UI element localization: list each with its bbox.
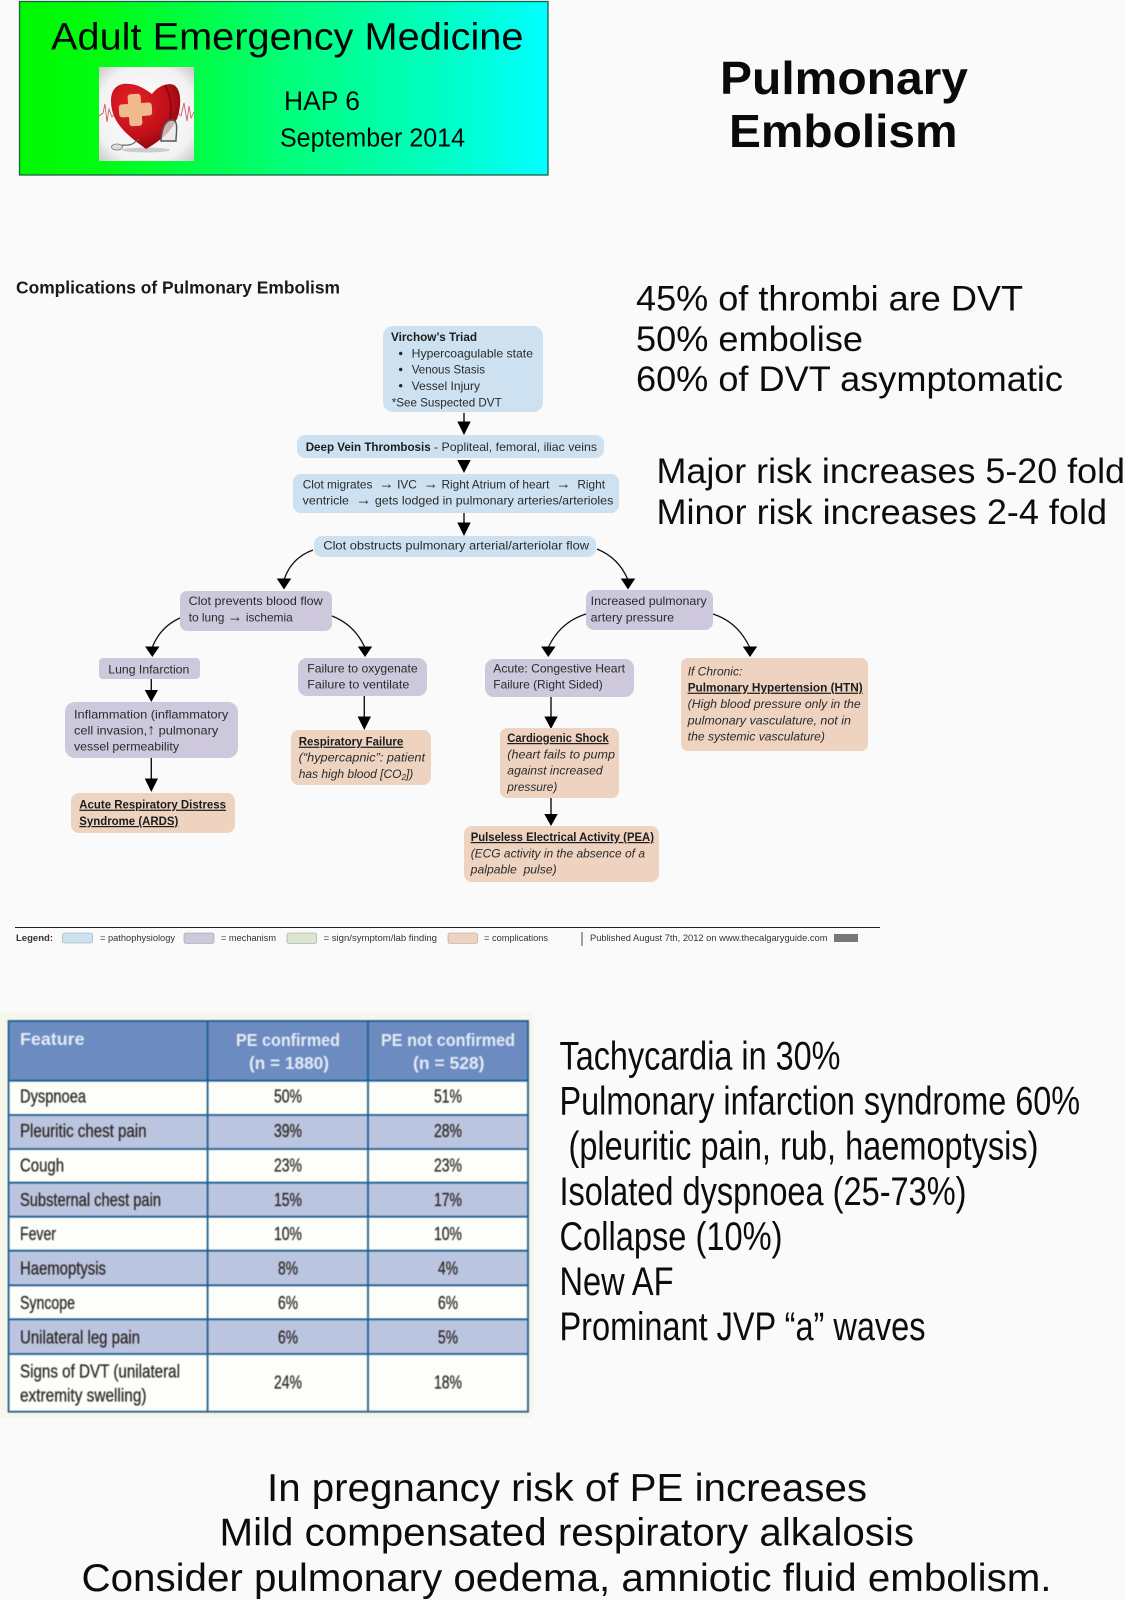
row: Syncope: 6% (278, 1293, 298, 1313)
row: Unilateral leg pain: 6% (278, 1327, 298, 1347)
legend: Published August 7th, 2012 on www.thecalgaryguide.com (590, 933, 828, 943)
box: Clot prevents blood flow (180, 591, 332, 631)
arrow: heart failure to cardiogenic shock (544, 697, 558, 729)
icon: heart with bandage and stethoscope (99, 67, 194, 161)
box: Inflammation: vessel permeability (74, 740, 179, 754)
box: Cardiogenic Shock: (heart fails to pump (507, 747, 615, 761)
row: Signs of DVT: extremity swelling) (20, 1386, 146, 1406)
box: Chronic pulmonary hypertension: Pulmonary Hypertension (HTN) (688, 681, 863, 695)
box: Chronic pulmonary hypertension (681, 658, 868, 751)
row: Dyspnoea (20, 1086, 462, 1106)
box: Acute congestive heart failure: Failure (Right Sided) (493, 677, 603, 691)
arrow: clot migrates to obstruction (457, 513, 471, 536)
text block: pregnancy notes: In pregnancy risk of PE increases (267, 1467, 867, 1510)
arrow: to acute heart failure (541, 614, 586, 657)
box: Pulseless Electrical Activity: (ECG activity in the absence of a (471, 846, 645, 860)
text: September 2014: September 2014 (280, 125, 465, 153)
row: Cough: Cough (20, 1156, 64, 1176)
row: Dyspnoea: 50% (274, 1086, 302, 1106)
legend: = mechanism (221, 933, 276, 943)
heading: Adult Emergency Medicine: Adult Emergency Medicine (51, 16, 524, 58)
box: Respiratory Failure: Respiratory Failure (299, 735, 404, 749)
text block: thrombi statistics: 45% of thrombi are DVT (636, 280, 1023, 319)
box: Inflammation: cell invasion, ↑ pulmonary (74, 721, 218, 738)
row: Pleuritic chest pain: Pleuritic chest pain (20, 1121, 146, 1141)
box: Virchow's Triad: Vessel Injury (412, 379, 480, 393)
box: Acute congestive heart failure: Acute: Congestive Heart (493, 661, 626, 675)
box: ARDS: Syndrome (ARDS) (79, 814, 178, 828)
row: Haemoptysis: Haemoptysis (20, 1258, 106, 1278)
legend: = sign/symptom/lab finding (324, 933, 437, 943)
legend: = complications (484, 933, 549, 943)
row: Signs of DVT: Signs of DVT (unilateral (20, 1362, 180, 1382)
row: Unilateral leg pain: 5% (438, 1327, 458, 1347)
box: Acute congestive heart failure (485, 659, 634, 697)
row: Haemoptysis: 8% (278, 1258, 298, 1278)
box: Clot migrates: ventricle → gets lodged in pulmonary arteries/arterioles (303, 491, 613, 508)
text block: clinical signs: Isolated dyspnoea (25-73%) (560, 1170, 966, 1214)
box: Lung Infarction (99, 658, 200, 679)
row: Unilateral leg pain (20, 1327, 458, 1347)
row: Syncope: 6% (438, 1293, 458, 1313)
panel: header banner (20, 2, 548, 175)
text block: clinical signs: Prominant JVP “a” waves (560, 1305, 926, 1349)
box: Virchow's Triad (383, 326, 543, 412)
row: Cough: 23% (434, 1156, 462, 1176)
box: Chronic pulmonary hypertension: pulmonary vasculature, not in (687, 713, 851, 727)
box: Pulseless Electrical Activity (464, 826, 659, 882)
row: Haemoptysis: 4% (438, 1258, 458, 1278)
text block: risk increases (656, 452, 1125, 532)
box: Respiratory Failure: (“hypercapnic”: patient (299, 751, 426, 765)
table header: (n = 1880) (249, 1053, 329, 1073)
arrow: obstruction to increased pressure (597, 549, 635, 590)
box: ARDS (71, 793, 235, 833)
box: Clot prevents blood flow: Clot prevents blood flow (189, 594, 323, 608)
box: Failure to oxygenate: Failure to oxygenate (307, 661, 418, 675)
row: Pleuritic chest pain (20, 1121, 462, 1141)
row: Fever: 10% (274, 1224, 302, 1244)
row: Pleuritic chest pain: 39% (274, 1121, 302, 1141)
box: Chronic pulmonary hypertension: (High blood pressure only in the (688, 697, 861, 711)
row: Signs of DVT: 18% (434, 1372, 462, 1392)
box: Lung Infarction: Lung Infarction (108, 662, 189, 676)
table: presenting features of PE (0, 1013, 533, 1418)
box: Clot migrates: Clot migrates → IVC → Right Atrium of heart → Right (303, 475, 606, 492)
arrow: to failure to oxygenate (332, 616, 372, 657)
box: Increased pulmonary artery pressure: Increased pulmonary (591, 594, 707, 608)
arrow: failure to respiratory failure (358, 696, 371, 730)
box: Deep Vein Thrombosis: - Popliteal, femoral, iliac veins (434, 440, 597, 454)
box: Respiratory Failure: has high blood [CO (299, 767, 401, 781)
box: Respiratory Failure: 2 (400, 773, 406, 782)
text block: pregnancy notes: Consider pulmonary oedema, amniotic fluid embolism. (82, 1557, 1052, 1600)
box: Increased pulmonary artery pressure: artery pressure (591, 610, 674, 624)
box: Clot prevents blood flow: to lung → ischemia (189, 608, 293, 625)
table header: PE confirmed (236, 1030, 340, 1050)
row: Signs of DVT: 24% (274, 1372, 302, 1392)
row: Fever: 10% (434, 1224, 462, 1244)
box: Virchow's Triad: *See Suspected DVT (392, 395, 502, 409)
legend (15, 928, 880, 946)
row: Dyspnoea: Dyspnoea (20, 1086, 87, 1106)
row: Syncope (20, 1293, 458, 1313)
text block: clinical signs: Collapse (10%) (560, 1215, 782, 1259)
row: Substernal chest pain: 15% (274, 1190, 302, 1210)
box: Virchow's Triad: Hypercoagulable state (412, 347, 533, 361)
legend: Legend: (16, 933, 53, 943)
box: Chronic pulmonary hypertension: If Chronic: (688, 665, 742, 679)
text block: thrombi statistics (636, 280, 1063, 399)
box: Respiratory Failure (291, 730, 431, 785)
arrow: DVT to clot migrates (457, 460, 471, 473)
arrow: triad to DVT (457, 413, 471, 435)
box: Clot obstructs flow (314, 536, 596, 557)
table header: (n = 528) (413, 1053, 484, 1073)
row: Unilateral leg pain: Unilateral leg pain (20, 1327, 140, 1347)
box: Cardiogenic Shock (500, 728, 619, 798)
table header: PE not confirmed (381, 1030, 515, 1050)
arrow: obstruction to clot prevents flow (277, 550, 313, 590)
row: Dyspnoea: 51% (434, 1086, 462, 1106)
box: Failure to oxygenate: Failure to ventilate (307, 677, 410, 691)
box: Deep Vein Thrombosis (297, 435, 604, 458)
box: Inflammation (65, 702, 238, 758)
box: Clot obstructs flow: Clot obstructs pulmonary arterial/arteriolar flow (323, 539, 589, 553)
text block: clinical signs: Tachycardia in 30% (560, 1034, 840, 1078)
text block: risk increases: Minor risk increases 2-4 fold (656, 493, 1107, 532)
arrow: to lung infarction (145, 618, 180, 657)
box: Cardiogenic Shock: Cardiogenic Shock (507, 731, 609, 745)
row: Haemoptysis (20, 1258, 458, 1278)
box: Virchow's Triad: Virchow’s Triad (391, 330, 477, 344)
text block: thrombi statistics: 50% embolise (636, 320, 863, 359)
box: Pulseless Electrical Activity: Pulseless Electrical Activity (PEA) (471, 830, 654, 844)
row: Signs of DVT (20, 1362, 462, 1406)
arrow: to chronic hypertension (713, 614, 757, 657)
row: Cough (20, 1156, 462, 1176)
text block: pregnancy notes: Mild compensated respiratory alkalosis (220, 1512, 914, 1555)
box: Clot migrates (293, 474, 619, 513)
box: Failure to oxygenate (298, 658, 427, 696)
arrow: infarction to inflammation (145, 679, 158, 702)
box: Pulseless Electrical Activity: palpable pulse) (470, 862, 557, 876)
box: Cardiogenic Shock: pressure) (506, 780, 557, 794)
title: Pulmonary Embolism: Embolism (729, 105, 958, 157)
arrow: shock to PEA (544, 798, 558, 826)
box: Cardiogenic Shock: against increased (507, 764, 603, 778)
box: Increased pulmonary artery pressure (586, 590, 713, 630)
text: HAP 6: HAP 6 (284, 86, 360, 116)
box: ARDS: Acute Respiratory Distress (79, 798, 226, 812)
row: Cough: 23% (274, 1156, 302, 1176)
text block: risk increases: Major risk increases 5-20 fold (656, 452, 1125, 491)
row: Substernal chest pain (20, 1190, 462, 1210)
text block: clinical signs (560, 1034, 1080, 1349)
flowchart: complications of pulmonary embolism (65, 326, 868, 882)
row: Syncope: Syncope (20, 1293, 75, 1313)
arrow: inflammation to ARDS (145, 758, 158, 792)
table header (20, 1029, 515, 1073)
heading: Complications of Pulmonary Embolism: Complications of Pulmonary Embolism (16, 277, 340, 297)
legend: = pathophysiology (100, 933, 176, 943)
text block: pregnancy notes (82, 1467, 1052, 1600)
box: Inflammation: Inflammation (inflammatory (74, 707, 228, 721)
text block: clinical signs: New AF (560, 1260, 674, 1304)
title: Pulmonary Embolism (720, 52, 968, 157)
row: Substernal chest pain: Substernal chest pain (20, 1190, 161, 1210)
box: Deep Vein Thrombosis: Deep Vein Thrombosis (306, 440, 431, 454)
box: Respiratory Failure: ]) (405, 767, 413, 781)
box: Chronic pulmonary hypertension: the systemic vasculature) (688, 729, 825, 743)
row: Fever (20, 1224, 462, 1244)
row: Pleuritic chest pain: 28% (434, 1121, 462, 1141)
row: Fever: Fever (20, 1224, 56, 1244)
row: Substernal chest pain: 17% (434, 1190, 462, 1210)
table header: Feature (20, 1029, 85, 1049)
text block: thrombi statistics: 60% of DVT asymptomatic (636, 360, 1063, 399)
title: Pulmonary Embolism: Pulmonary (720, 52, 968, 104)
box: Virchow's Triad: Venous Stasis (412, 363, 485, 377)
